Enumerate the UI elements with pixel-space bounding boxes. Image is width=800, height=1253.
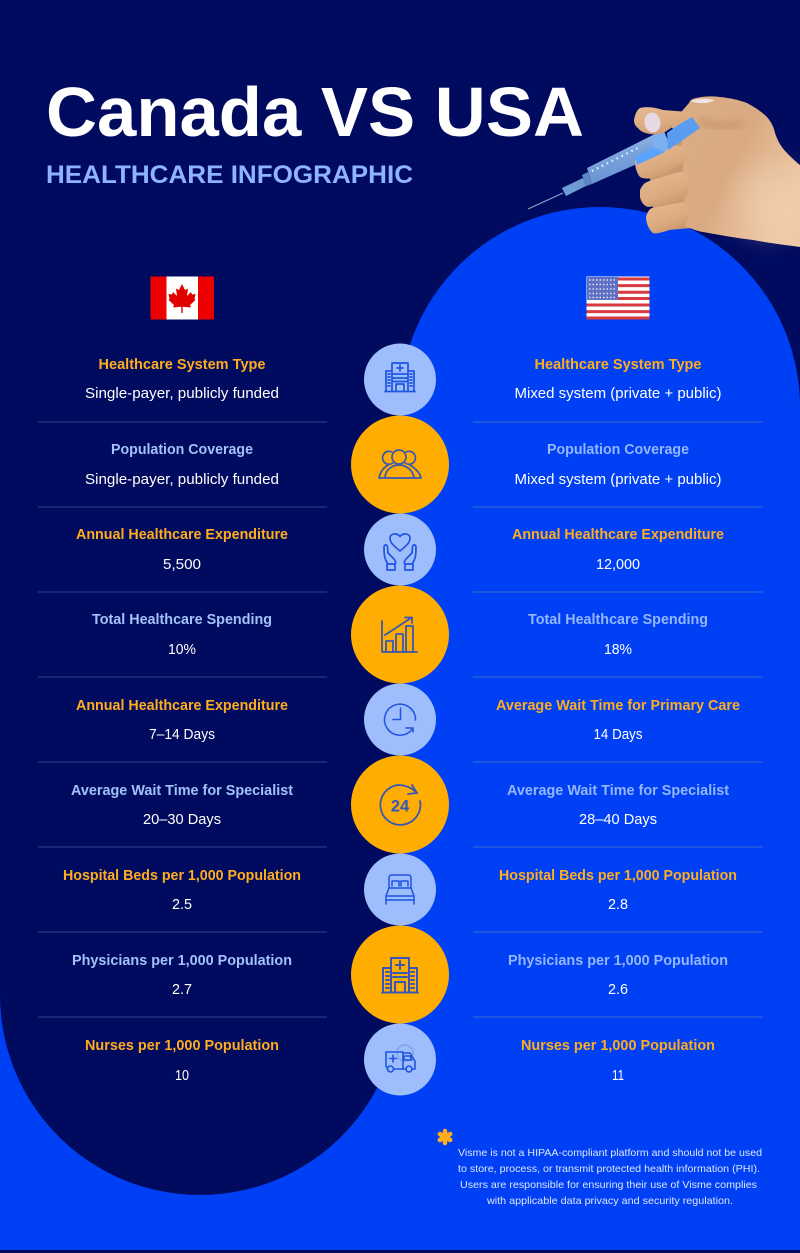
- row: healthcare system type: [514, 357, 722, 402]
- disclaimer text: [458, 1148, 762, 1207]
- row: nurses: 10: [175, 1068, 189, 1084]
- finger shadow fill: [650, 138, 692, 230]
- label: 24: 24: [391, 798, 410, 816]
- row: physicians: 2.7: [172, 982, 192, 998]
- row: total spending: [92, 612, 272, 658]
- row: annual expenditure: Annual Healthcare Expenditure: [512, 527, 724, 543]
- needle: [528, 193, 563, 209]
- icon: clock on pale circle: [364, 684, 436, 756]
- row: annual expenditure: [512, 527, 724, 573]
- row: total spending: Total Healthcare Spending: [528, 612, 708, 628]
- thumb shadow: [699, 120, 742, 126]
- row: hospital beds: Hospital Beds per 1,000 Population: [499, 868, 737, 884]
- icon: hands holding heart on pale circle: [364, 514, 436, 586]
- row: specialist wait: Average Wait Time for Specialist: [71, 783, 293, 799]
- row: population coverage: Population Coverage: [547, 442, 689, 458]
- fingernail: [643, 111, 662, 134]
- row: primary care wait: 7–14 Days: [149, 727, 215, 743]
- row: primary care wait: [496, 698, 740, 743]
- row: population coverage: Population Coverage: [111, 442, 253, 458]
- illustration: hand holding syringe: [528, 96, 800, 247]
- icon: hospital on orange circle: [351, 926, 449, 1024]
- row: annual expenditure: Annual Healthcare Expenditure: [76, 527, 288, 543]
- icon: hospital on pale circle: [364, 344, 436, 416]
- syringe plunger over finger: [635, 117, 700, 165]
- row: healthcare system type: Healthcare System Type: [534, 357, 702, 373]
- row: primary care wait: 14 Days: [594, 727, 642, 743]
- subtitle: HEALTHCARE INFOGRAPHIC: [46, 161, 413, 189]
- disclaimer text: with applicable data privacy and security regulation.: [486, 1196, 733, 1207]
- column: USA: [496, 357, 740, 1084]
- icon: people on orange circle: [351, 416, 449, 514]
- row: primary care wait: Average Wait Time for Primary Care: [496, 698, 740, 714]
- row: total spending: Total Healthcare Spending: [92, 612, 272, 628]
- row: specialist wait: 20–30 Days: [143, 812, 221, 828]
- row: physicians: [508, 953, 728, 998]
- middle finger: [640, 172, 690, 207]
- row: physicians: 2.6: [608, 982, 628, 998]
- row: population coverage: Mixed system (private + public): [514, 472, 722, 488]
- row: population coverage: [514, 442, 722, 488]
- row: primary care wait: Annual Healthcare Expenditure: [76, 698, 288, 714]
- title: Canada VS USA: [46, 73, 584, 151]
- dividers: [38, 422, 763, 1017]
- icon: ambulance on pale circle: [364, 1024, 436, 1096]
- row: total spending: 18%: [604, 642, 632, 658]
- row: hospital beds: Hospital Beds per 1,000 Population: [63, 868, 301, 884]
- row: specialist wait: Average Wait Time for Specialist: [507, 783, 729, 799]
- icon: bar chart on orange circle: [351, 586, 449, 684]
- row: total spending: [528, 612, 708, 658]
- fingertip: [634, 107, 690, 134]
- row: physicians: [72, 953, 292, 998]
- row: nurses: Nurses per 1,000 Population: [521, 1038, 715, 1054]
- thumb nail: [691, 99, 714, 103]
- row: hospital beds: 2.5: [172, 897, 192, 913]
- palm highlight: [738, 168, 798, 232]
- row: healthcare system type: [85, 357, 279, 402]
- row: specialist wait: [507, 783, 729, 828]
- disclaimer text: Visme is not a HIPAA-compliant platform and should not be used: [458, 1148, 762, 1159]
- row: nurses: [521, 1038, 715, 1084]
- flag: USA: [586, 276, 650, 320]
- row: hospital beds: [63, 868, 301, 913]
- row: specialist wait: 28–40 Days: [579, 812, 657, 828]
- navy rounded panel: [0, 400, 400, 1195]
- palm: [670, 96, 800, 247]
- row: nurses: Nurses per 1,000 Population: [85, 1038, 279, 1054]
- row: total spending: 10%: [168, 642, 196, 658]
- column: Canada: [63, 357, 301, 1084]
- row: population coverage: Single-payer, publicly funded: [85, 472, 279, 488]
- row: annual expenditure: 12,000: [596, 557, 640, 573]
- disclaimer text: Users are responsible for ensuring their use of Visme complies: [460, 1180, 757, 1191]
- row: healthcare system type: Healthcare System Type: [98, 357, 266, 373]
- disclaimer text: to store, process, or transmit protected health information (PHI).: [458, 1164, 760, 1175]
- row: hospital beds: 2.8: [608, 897, 628, 913]
- row: physicians: Physicians per 1,000 Population: [72, 953, 292, 969]
- index finger: [635, 144, 685, 179]
- maple leaf: [168, 284, 196, 313]
- flag: Canada: [150, 276, 214, 320]
- row: population coverage: [85, 442, 279, 488]
- row: healthcare system type: Single-payer, publicly funded: [85, 386, 279, 402]
- ring finger: [646, 202, 688, 233]
- row: annual expenditure: [76, 527, 288, 573]
- row: nurses: 11: [612, 1068, 624, 1084]
- row: nurses: [85, 1038, 279, 1084]
- icon: bed on pale circle: [364, 854, 436, 926]
- row: physicians: Physicians per 1,000 Population: [508, 953, 728, 969]
- row: healthcare system type: Mixed system (private + public): [514, 386, 722, 402]
- row: specialist wait: [71, 783, 293, 828]
- row: hospital beds: [499, 868, 737, 913]
- icon: asterisk: [440, 1131, 450, 1143]
- icon: 24 hours on orange circle: [351, 756, 449, 854]
- row: annual expenditure: 5,500: [163, 557, 201, 573]
- syringe body: [562, 133, 668, 196]
- row: primary care wait: [76, 698, 288, 743]
